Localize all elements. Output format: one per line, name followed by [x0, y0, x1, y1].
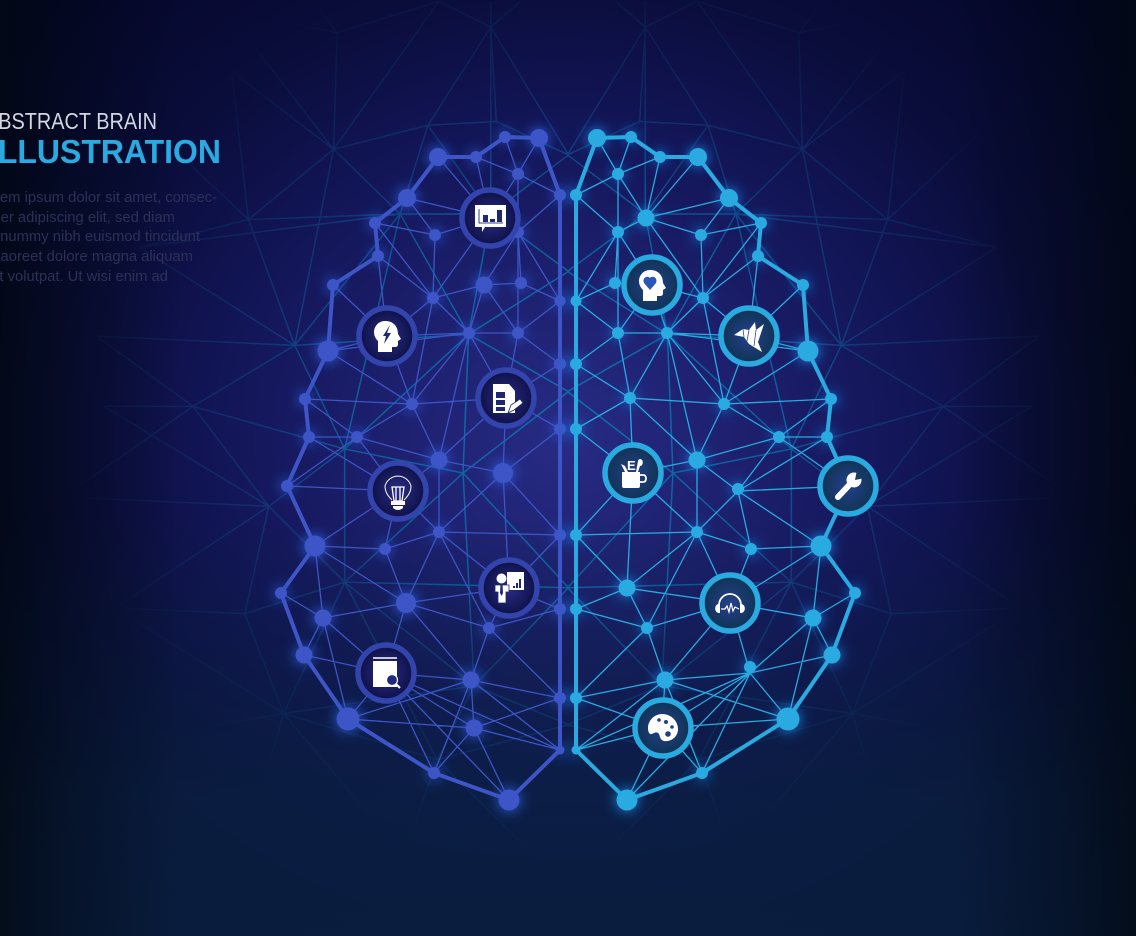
- icon: head with lightning bolt: [359, 308, 415, 364]
- left hemisphere network: [275, 129, 566, 810]
- left node glow: [275, 129, 566, 810]
- left nodes: [275, 129, 566, 810]
- icon: mug with pens: E: [627, 458, 636, 473]
- right nodes: [570, 129, 861, 810]
- left outline: [281, 137, 560, 800]
- background network: [104, 1, 1032, 814]
- body text: [0, 190, 217, 285]
- right outline: [576, 137, 855, 800]
- icon: mug with pens: [605, 445, 661, 501]
- title: [0, 108, 221, 170]
- right connections: [576, 137, 855, 800]
- icon: document and pencil: [478, 370, 534, 426]
- right node glow: [570, 129, 861, 810]
- icon: chart speech bubble: [462, 190, 518, 246]
- icon: head with heart: [624, 257, 680, 313]
- icon: light bulb: [370, 463, 426, 519]
- icon: wrench: [820, 458, 876, 514]
- right hemisphere network: [570, 129, 861, 810]
- icon: book with magnifier: [358, 645, 414, 701]
- icon: paint palette: [635, 700, 691, 756]
- left connections: [281, 137, 560, 800]
- icon: presenter with chart board: [481, 560, 537, 616]
- icon: origami bird: [721, 308, 777, 364]
- icon: headphones with waveform: [702, 575, 758, 631]
